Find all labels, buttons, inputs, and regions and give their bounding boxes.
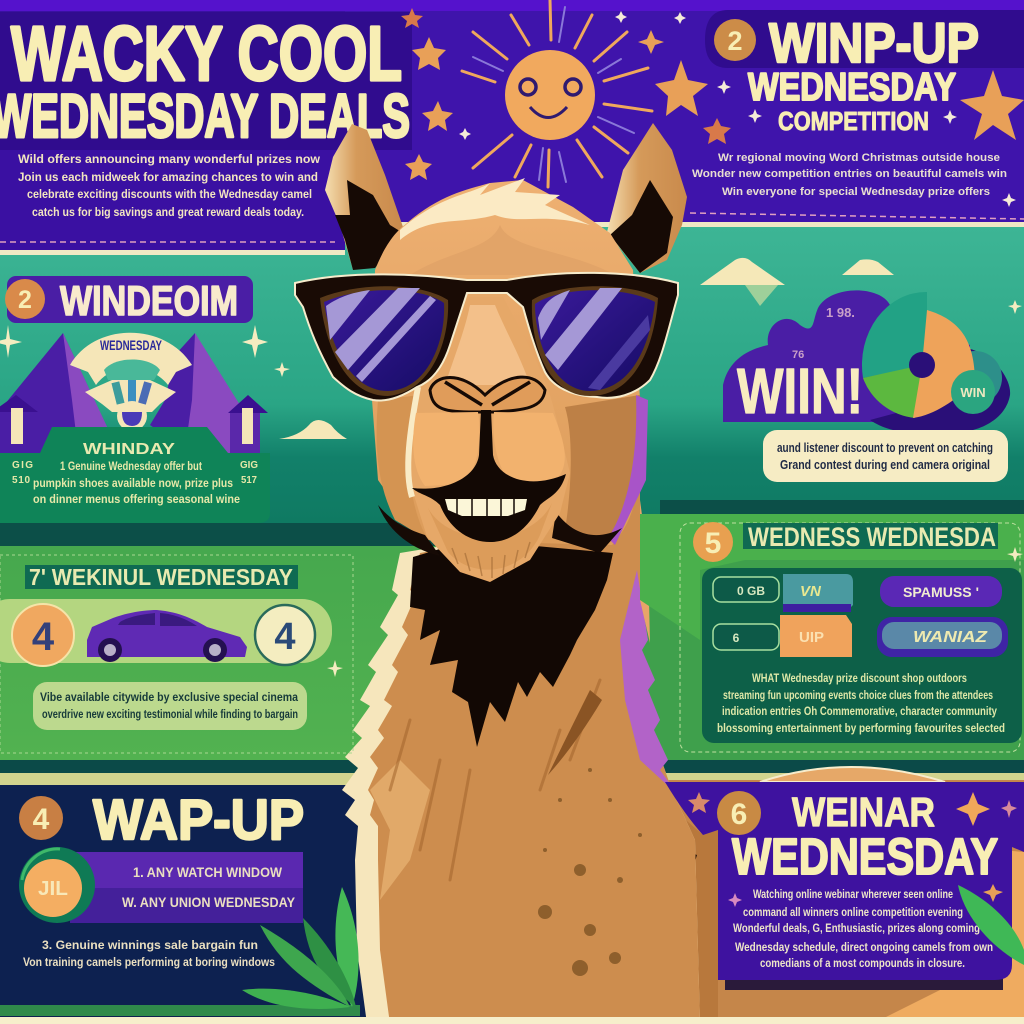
heading: winp-up: WINP-UP — [769, 11, 979, 74]
rows: 1. ANY WATCH WINDOW — [133, 864, 283, 880]
heading: weekly wednesday: 7' WEKINUL WEDNESDAY — [29, 564, 293, 590]
rows: W. ANY UNION WEDNESDAY — [122, 894, 296, 910]
stat labels: 510 — [12, 475, 30, 486]
text block: competition paragraph — [692, 152, 1007, 198]
text block: win caption — [763, 430, 1008, 482]
purple button — [880, 576, 1002, 607]
panel: section 3 windeoim banner — [5, 276, 253, 324]
number badge 6 — [717, 791, 761, 835]
blue button — [877, 617, 1008, 657]
heading: competition: COMPETITION — [778, 106, 929, 136]
panel: top left title and intro — [0, 0, 1024, 255]
panel: car pill — [0, 599, 332, 666]
camel ears — [325, 123, 687, 273]
rows — [70, 852, 303, 923]
camel head — [372, 178, 648, 582]
badge: WIN — [960, 385, 986, 400]
text block: section 3 body: 1 Genuine Wednesday offer but — [60, 459, 202, 473]
text block: intro paragraph: Join us each midweek for amazing chances to win and — [18, 170, 318, 184]
camel neck — [342, 490, 700, 1024]
text block: intro paragraph: celebrate exciting discounts with the Wednesday camel — [27, 187, 312, 201]
arc behind — [760, 767, 945, 782]
text block: section 5 body — [717, 671, 1005, 735]
text block: win caption: Grand contest during end camera original — [780, 458, 990, 472]
number badge 4 left — [12, 604, 74, 666]
icons: white sparkles top — [459, 11, 1016, 207]
panel: section 6 webinar — [665, 767, 1024, 990]
table row 1 — [713, 574, 853, 612]
sunglasses — [295, 273, 678, 400]
sparkles right — [327, 300, 1023, 677]
icon: green badge: JIL — [38, 878, 68, 900]
panel: section 3 green text box — [0, 427, 270, 523]
table row 2: UIP — [799, 629, 824, 646]
panel: win pie chart: 1 98. — [826, 305, 855, 320]
table row 1: VN — [800, 583, 822, 600]
panel: section 5 — [640, 514, 1024, 752]
forehead fur tufts — [400, 178, 590, 240]
left lens — [324, 288, 444, 391]
icons: orange stars top — [401, 8, 1024, 180]
number badge 2 — [714, 19, 756, 61]
heading: weinar: WEINAR — [792, 789, 935, 835]
number badge 4 right — [255, 605, 315, 665]
text block: wrap-up body — [23, 938, 275, 969]
heading: wednesday: WEDNESDAY — [748, 66, 956, 109]
icon: purple car — [87, 610, 247, 662]
cloud shape — [723, 290, 970, 422]
heading: wap-up: WAP-UP — [93, 788, 304, 852]
nostril block — [430, 377, 545, 412]
text block: competition paragraph: Wr regional moving Word Christmas outside house — [718, 152, 1000, 164]
heading: windsday: WHINDAY — [83, 441, 175, 458]
bottom cream strip — [0, 1017, 1024, 1024]
table row 1: 0 GB — [737, 584, 765, 598]
chin — [428, 503, 552, 570]
stat labels: GIG — [12, 460, 33, 471]
pink fringe — [620, 570, 678, 795]
text block: intro paragraph — [18, 152, 321, 219]
text block: competition paragraph: Wonder new competition entries on beautiful camels win — [692, 168, 1007, 180]
heading: wacky cool: WACKY COOL — [11, 11, 402, 97]
illustration: purple mountains with fan emblem: WEDNESDAY — [100, 337, 162, 353]
text block: section 5 body: WHAT Wednesday prize discount shop outdoors — [752, 671, 967, 685]
number badge 4 left: 4 — [32, 615, 55, 659]
number badge 2: 2 — [727, 26, 743, 56]
number badge 4 right: 4 — [274, 616, 296, 658]
forehead shading — [410, 225, 615, 275]
text block: section 3 body — [33, 459, 240, 506]
panel: section 4 wrap-up — [19, 788, 304, 969]
icons: stars around section 6 — [688, 792, 1017, 907]
number badge 4 — [19, 796, 63, 840]
text block: car caption — [33, 682, 307, 730]
table row 2: 6 — [733, 631, 740, 645]
purple button: SPAMUSS ' — [903, 584, 979, 600]
upper lip lobes — [413, 412, 479, 486]
spots — [538, 768, 642, 976]
panel: section 7 header — [0, 555, 353, 753]
pie slices — [862, 292, 927, 378]
heading: wednesday deals: WEDNESDAY DEALS — [0, 82, 410, 150]
number badge 5 — [693, 522, 733, 562]
number badge 6: 6 — [731, 798, 747, 831]
heading strip — [743, 523, 998, 549]
text block: wrap-up body: Von training camels performing at boring windows — [23, 955, 275, 969]
icon: green leaves bottom left — [242, 887, 359, 1009]
stat labels — [12, 460, 258, 486]
fur streaks — [390, 680, 600, 880]
right face purple edge — [608, 395, 648, 545]
table row 2 — [713, 615, 852, 657]
panel: section 2 competition header — [705, 10, 1024, 74]
number badge 4: 4 — [33, 803, 50, 836]
text block: intro paragraph: Wild offers announcing many wonderful prizes now — [18, 152, 321, 166]
text block: webinar body — [733, 887, 993, 970]
icon: green leaf right — [958, 885, 1024, 965]
snout — [407, 297, 570, 582]
cheeks — [377, 395, 428, 540]
blue button: WANIAZ — [913, 629, 988, 646]
text block: section 3 body: on dinner menus offering seasonal wine — [33, 492, 240, 506]
icons: clouds right — [700, 258, 894, 306]
dashed divider right — [690, 213, 1024, 219]
text block: competition paragraph: Win everyone for special Wednesday prize offers — [722, 186, 990, 198]
camel mouth — [412, 410, 566, 542]
text block: intro paragraph: catch us for big savings and great reward deals today. — [32, 205, 304, 219]
panel: win pie chart: 76 — [792, 349, 804, 361]
icon: sun — [462, 0, 652, 187]
number badge 5: 5 — [705, 527, 721, 560]
text block: webinar body: Watching online webinar wherever seen online — [753, 887, 953, 901]
icons: sparkles left — [0, 325, 290, 377]
stat labels: 517 — [241, 475, 257, 486]
number badge 2: 2 — [18, 286, 32, 314]
text block: car caption: overdrive new exciting testimonial while finding to bargain — [42, 707, 298, 721]
right lens — [535, 288, 655, 391]
text block: wrap-up body: 3. Genuine winnings sale bargain fun — [42, 938, 258, 952]
heading: windeoim: WINDEOIM — [60, 277, 238, 324]
heading: win: WIIN! — [737, 355, 863, 427]
badge — [951, 370, 995, 414]
text block: car caption: Vibe available citywide by exclusive special cinema — [40, 690, 298, 704]
text block: section 3 body: pumpkin shoes available now, prize plus — [33, 476, 233, 490]
stat labels: GIG — [240, 460, 258, 471]
cheek contours — [378, 505, 622, 556]
camel body — [640, 780, 1024, 1020]
icon: cloud left — [279, 420, 347, 439]
text block: webinar body: command all winners online competition evening — [743, 905, 963, 919]
camel beard — [410, 540, 613, 747]
number badge 2 — [5, 279, 45, 319]
panel: win pie chart — [723, 290, 1010, 433]
text block: webinar body: comedians of a most compounds in closure. — [760, 956, 965, 970]
glasses brown ring — [320, 286, 658, 396]
icon: green badge — [19, 847, 95, 923]
illustration: purple mountains with fan emblem — [0, 333, 268, 457]
